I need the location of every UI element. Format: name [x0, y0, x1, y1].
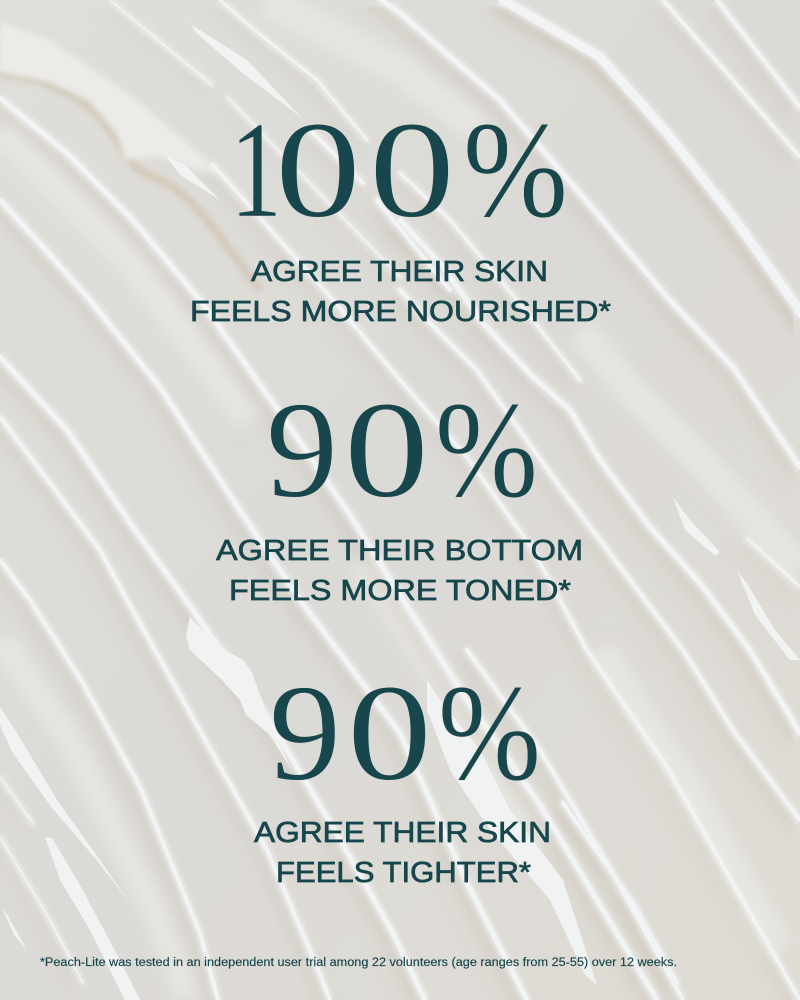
- footnote: *Peach-Lite was tested in an independent user trial among 22 volunteers (age ranges from 25-55) over 12 weeks.: [40, 957, 677, 969]
- number: 90% second: 9: [269, 656, 341, 809]
- caption: tighter: AGREE THEIR SKIN: [254, 817, 551, 849]
- caption: toned: [216, 535, 583, 607]
- caption: nourished: AGREE THEIR SKIN: [251, 256, 548, 288]
- caption: nourished: FEELS MORE NOURISHED*: [190, 296, 611, 328]
- number: 100%: 1: [230, 93, 282, 246]
- number: 90%: 9: [266, 373, 338, 526]
- caption: tighter: [254, 817, 551, 889]
- stat: 90% toned: [216, 373, 583, 607]
- number: 90%: %: [435, 373, 538, 526]
- caption: toned: AGREE THEIR BOTTOM: [216, 535, 583, 567]
- number: 90%: 0: [344, 373, 429, 526]
- number: 90% second: 0: [347, 656, 432, 809]
- number: 90% second: %: [438, 656, 541, 809]
- number: 100%: %: [463, 93, 568, 246]
- soft white band upper left: [0, 22, 222, 178]
- stat: 90% tighter: [254, 656, 551, 889]
- caption: nourished: [190, 256, 611, 328]
- stat: 100% nourished: [190, 93, 611, 328]
- number: 100%: 0: [369, 93, 455, 246]
- caption: tighter: FEELS TIGHTER*: [276, 857, 531, 889]
- caption: toned: FEELS MORE TONED*: [229, 575, 571, 607]
- tan streak: [0, 74, 260, 290]
- number: 100%: 0: [275, 93, 361, 246]
